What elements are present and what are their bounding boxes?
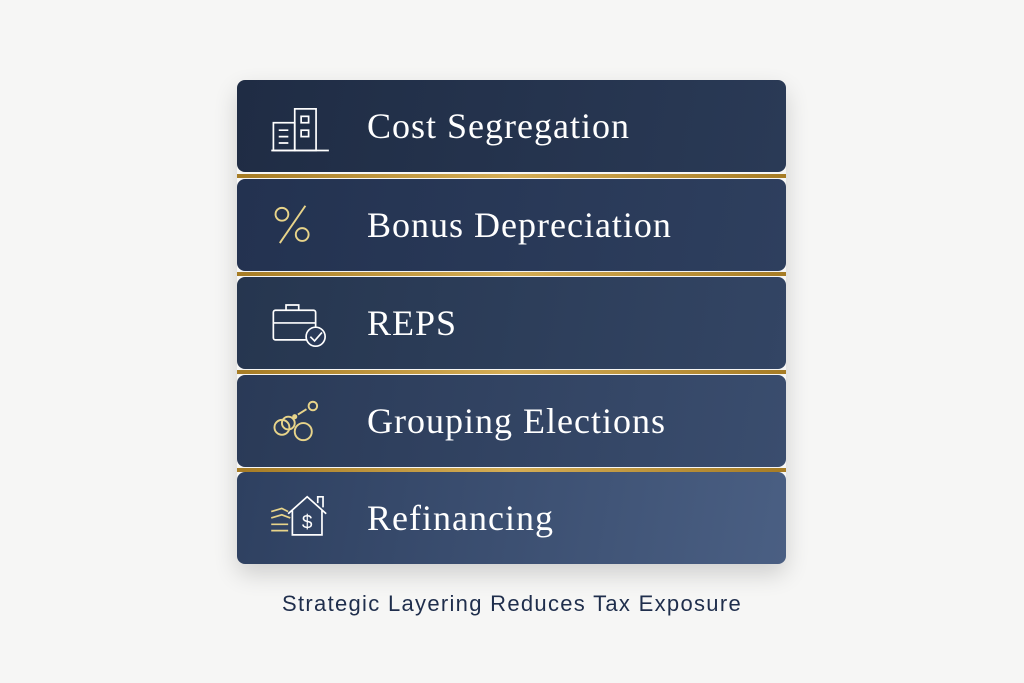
icon: briefcase check xyxy=(272,304,326,347)
row: bonus depreciation xyxy=(237,179,786,271)
row: bonus depreciation: Bonus Depreciation xyxy=(367,205,672,245)
icon: money house: $ xyxy=(302,513,313,534)
row: REPS: REPS xyxy=(367,303,457,343)
row: cost segregation xyxy=(237,80,786,172)
icon: money house xyxy=(271,496,327,536)
row: grouping elections: Grouping Elections xyxy=(367,401,666,441)
panel: strategy stack xyxy=(228,80,795,583)
row: cost segregation: Cost Segregation xyxy=(367,106,630,146)
row: REPS xyxy=(237,277,786,369)
icon: buildings xyxy=(271,108,329,152)
icon: percent xyxy=(274,205,310,244)
icon: linked circles xyxy=(274,400,318,442)
row: refinancing: Refinancing xyxy=(367,498,554,538)
caption: Strategic Layering Reduces Tax Exposure xyxy=(282,591,742,616)
row: refinancing xyxy=(237,472,786,564)
row: grouping elections xyxy=(237,375,786,467)
